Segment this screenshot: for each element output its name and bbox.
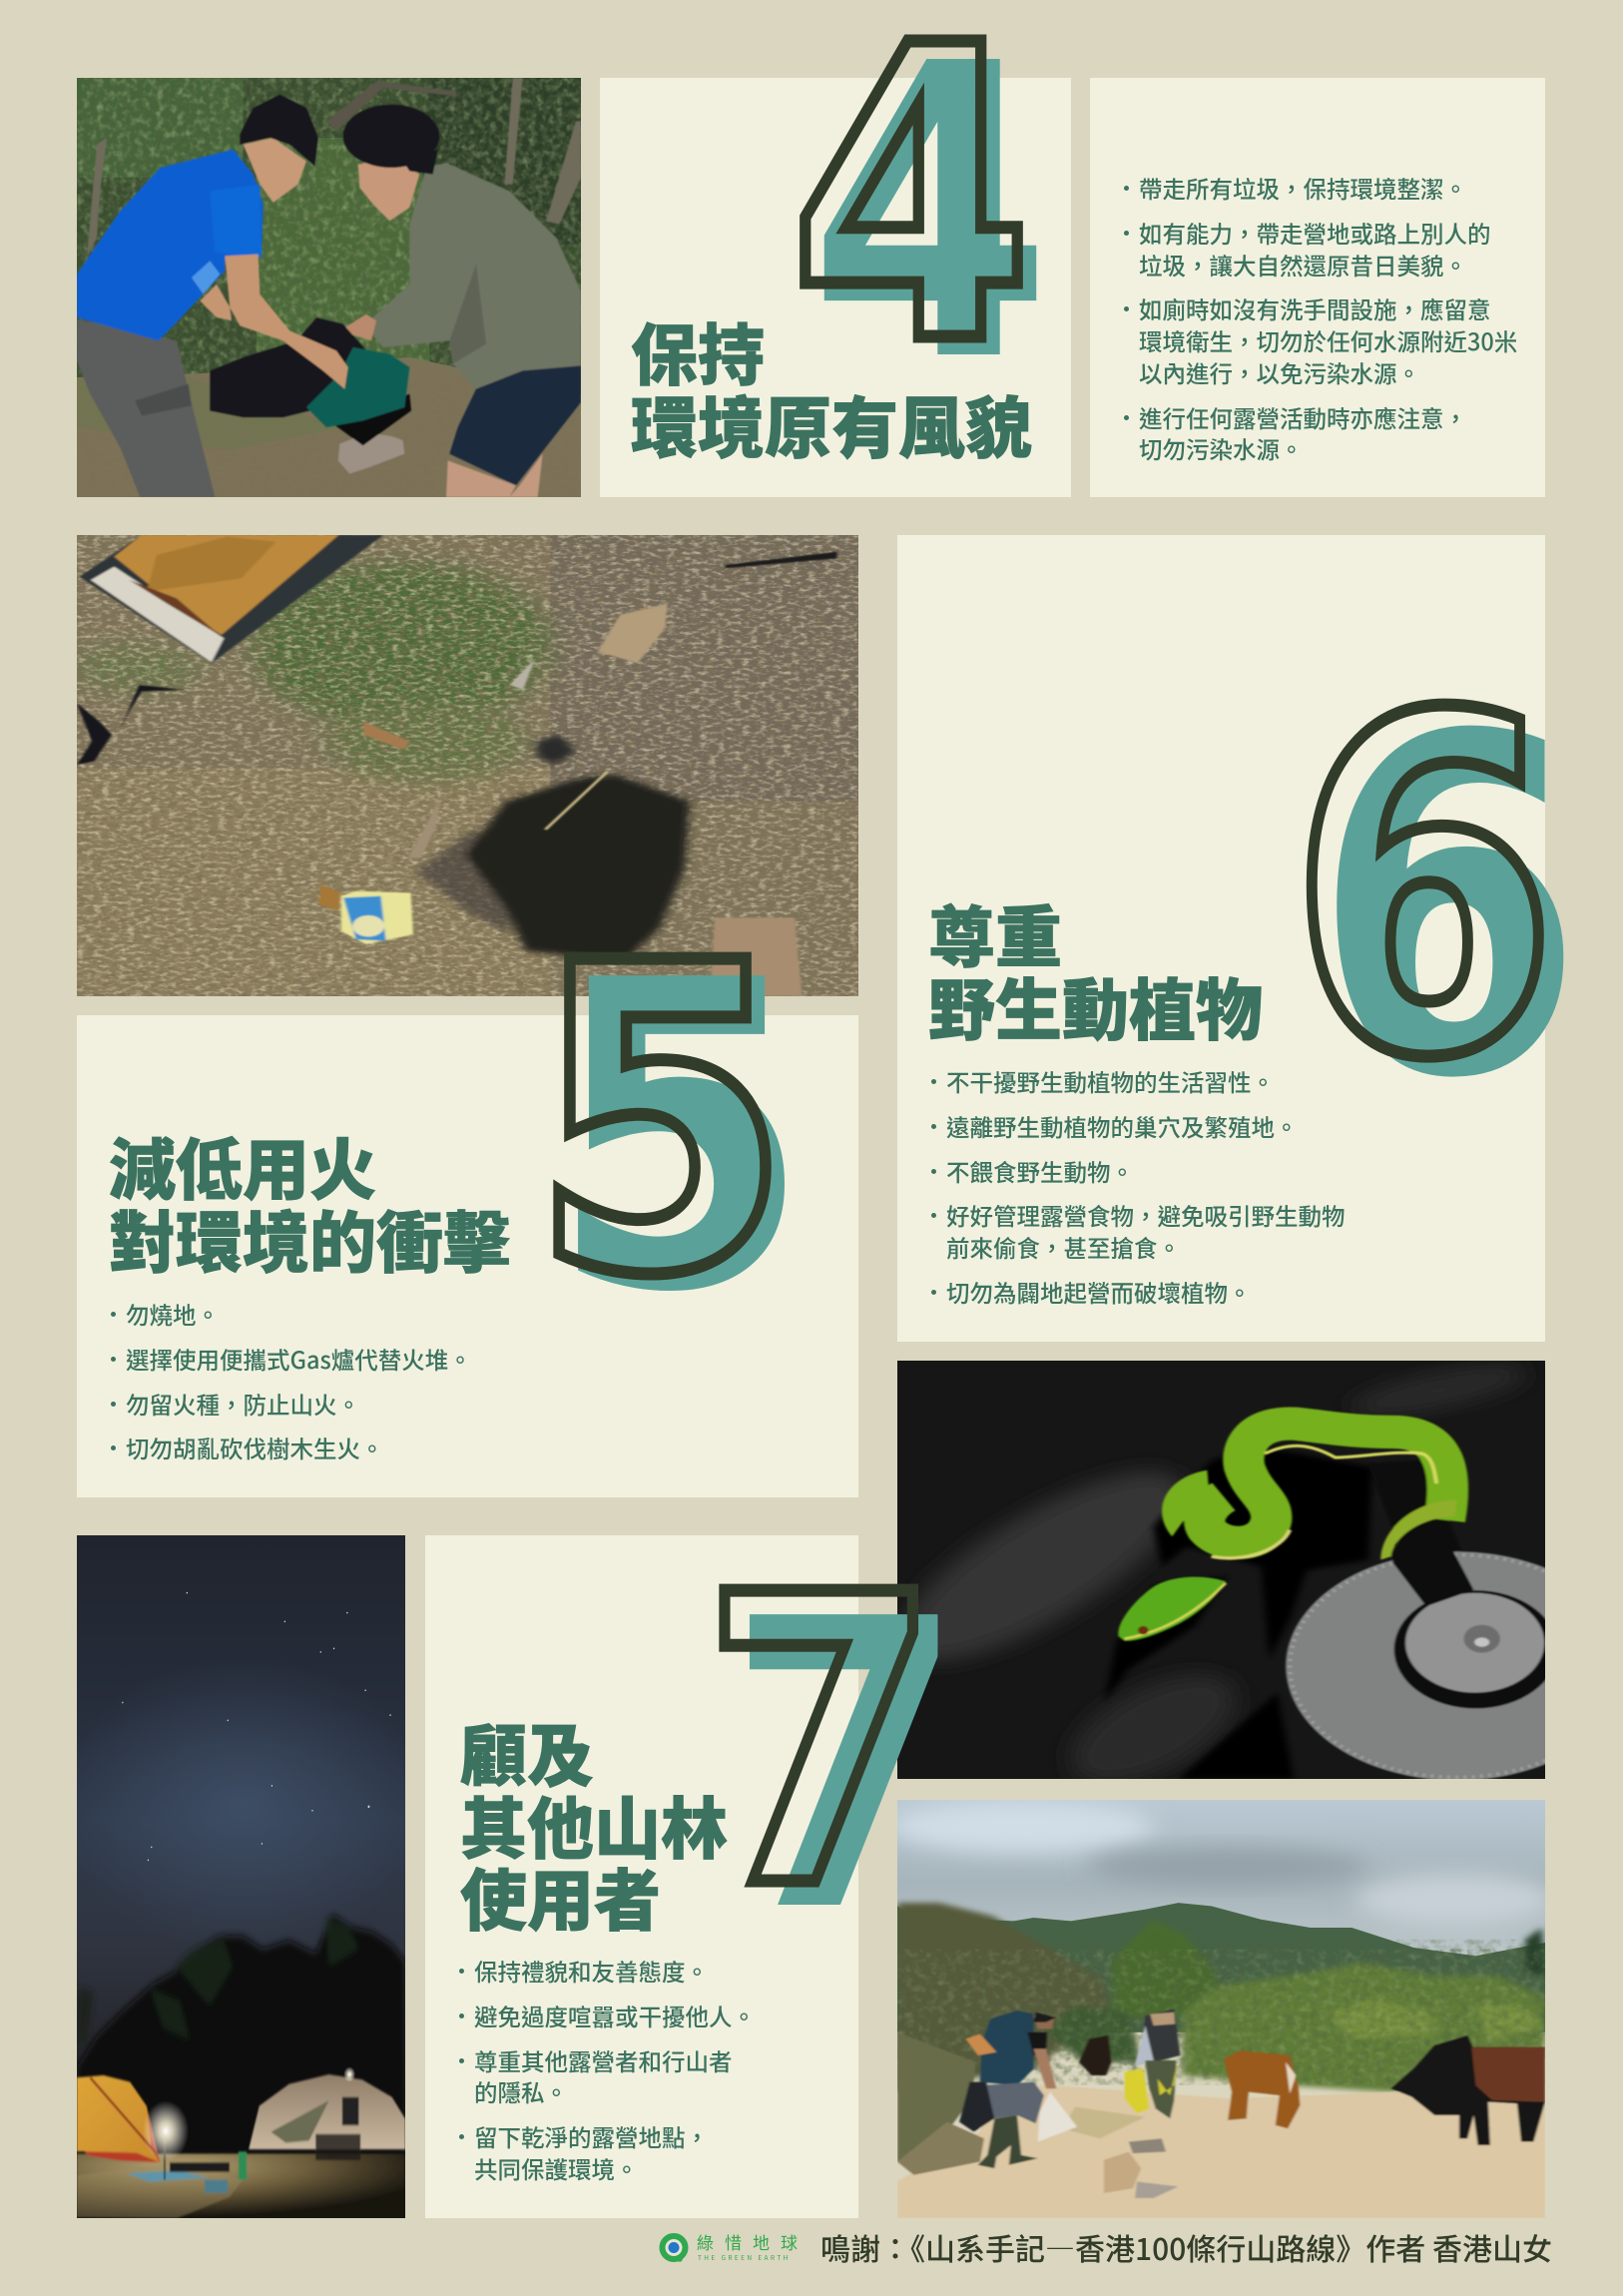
bullet list: principle 4: 以內進行，以免污染水源。	[1139, 355, 1420, 389]
panel: principle 4 tips	[1090, 78, 1545, 497]
icon: green ring with blue dot	[659, 2233, 689, 2262]
heading: 減低用火對環境的衝擊: 對環境的衝擊	[109, 1190, 510, 1286]
photo: night sky over lit tents	[77, 1535, 405, 2218]
bullet list: principle 4: 環境衛生，切勿於任何水源附近30米	[1139, 323, 1517, 357]
bullet list: principle 7: 尊重其他露營者和行山者	[474, 2043, 733, 2077]
bullet list: principle 7: 共同保護環境。	[474, 2151, 639, 2185]
logo name: 綠惜地球	[697, 2229, 809, 2254]
numeral 5: 5	[549, 890, 811, 1386]
bullet list: principle 6: 切勿為闢地起營而破壞植物。	[946, 1275, 1252, 1309]
bullet list: principle 4: 如有能力，帶走營地或路上別人的	[1139, 216, 1491, 250]
bullet list: principle 4: 切勿污染水源。	[1139, 431, 1304, 465]
numeral 7: 7	[727, 1535, 965, 1999]
panel: principle 4 heading	[600, 78, 1071, 497]
bullet list: principle 5: 選擇使用便攜式Gas爐代替火堆。	[126, 1342, 472, 1376]
bullet list: principle 6: 不干擾野生動植物的生活習性。	[946, 1064, 1275, 1098]
bullet list: principle 4	[1124, 171, 1517, 465]
bullet list: principle 7: 的隱私。	[474, 2074, 568, 2108]
bullet list: principle 6: 前來偷食，甚至搶食。	[946, 1230, 1181, 1264]
heading: 減低用火對環境的衝擊: 減低用火	[109, 1117, 376, 1214]
bullet list: principle 5: 切勿胡亂砍伐樹木生火。	[126, 1431, 383, 1464]
photo: hikers with rubbish bags beside cattle	[897, 1800, 1545, 2218]
bullet list: principle 4: 垃圾，讓大自然還原昔日美貌。	[1139, 248, 1467, 282]
numeral 5: 5	[530, 873, 792, 1369]
bullet list: principle 6	[931, 1064, 1346, 1309]
bullet list: principle 4: 帶走所有垃圾，保持環境整潔。	[1139, 171, 1467, 205]
bullet list: principle 7: 留下乾淨的露營地點，	[474, 2119, 709, 2153]
heading: 減低用火對環境的衝擊	[109, 1117, 511, 1286]
logo: The Green Earth	[659, 2229, 809, 2262]
heading: 尊重野生動植物: 野生動植物	[928, 956, 1263, 1054]
heading: 保持環境原有風貌: 環境原有風貌	[631, 375, 1032, 471]
heading: 顧及其他山林使用者: 其他山林	[460, 1775, 728, 1873]
heading: 尊重野生動植物	[928, 884, 1263, 1054]
heading: 保持環境原有風貌	[631, 302, 1032, 471]
numeral 6: 6	[1288, 620, 1559, 1160]
panel: principle 7	[425, 1535, 858, 2218]
numeral 6: 6	[1313, 640, 1584, 1180]
panel: principle 5	[77, 1015, 858, 1497]
heading: 保持環境原有風貌: 保持	[631, 302, 765, 399]
numeral 7: 7	[702, 1511, 940, 1975]
logo english name: THE GREEN EARTH	[698, 2252, 791, 2262]
bullet list: principle 7: 保持禮貌和友善態度。	[474, 1954, 709, 1988]
bullet list: principle 6: 好好管理露營食物，避免吸引野生動物	[946, 1198, 1346, 1232]
bullet list: principle 5: 勿燒地。	[126, 1297, 220, 1331]
credit line: 鳴謝：《山系手記—香港100條行山路線》作者 香港山女	[820, 2225, 1552, 2269]
heading: 顧及其他山林使用者: 使用者	[460, 1848, 661, 1945]
bullet list: principle 4: 進行任何露營活動時亦應注意，	[1139, 399, 1467, 433]
bullet list: principle 7: 避免過度喧囂或干擾他人。	[474, 1999, 756, 2032]
bullet list: principle 5: 勿留火種，防止山火。	[126, 1387, 360, 1421]
heading: 顧及其他山林使用者	[460, 1703, 728, 1945]
photo: green pit viper on a gas canister	[897, 1361, 1545, 1779]
bullet list: principle 6: 不餵食野生動物。	[946, 1154, 1134, 1188]
photo: two campers packing rubbish into bags	[77, 78, 581, 497]
panel: principle 6	[897, 535, 1545, 1342]
bullet list: principle 5	[111, 1297, 472, 1464]
heading: 顧及其他山林使用者: 顧及	[460, 1703, 594, 1800]
heading: 尊重野生動植物: 尊重	[928, 884, 1062, 981]
bullet list: principle 7	[459, 1954, 756, 2185]
photo: burnt patch on dry grass with litter	[77, 535, 858, 996]
bullet list: principle 6: 遠離野生動植物的巢穴及繁殖地。	[946, 1109, 1298, 1143]
bullet list: principle 4: 如廁時如沒有洗手間設施，應留意	[1139, 291, 1491, 325]
